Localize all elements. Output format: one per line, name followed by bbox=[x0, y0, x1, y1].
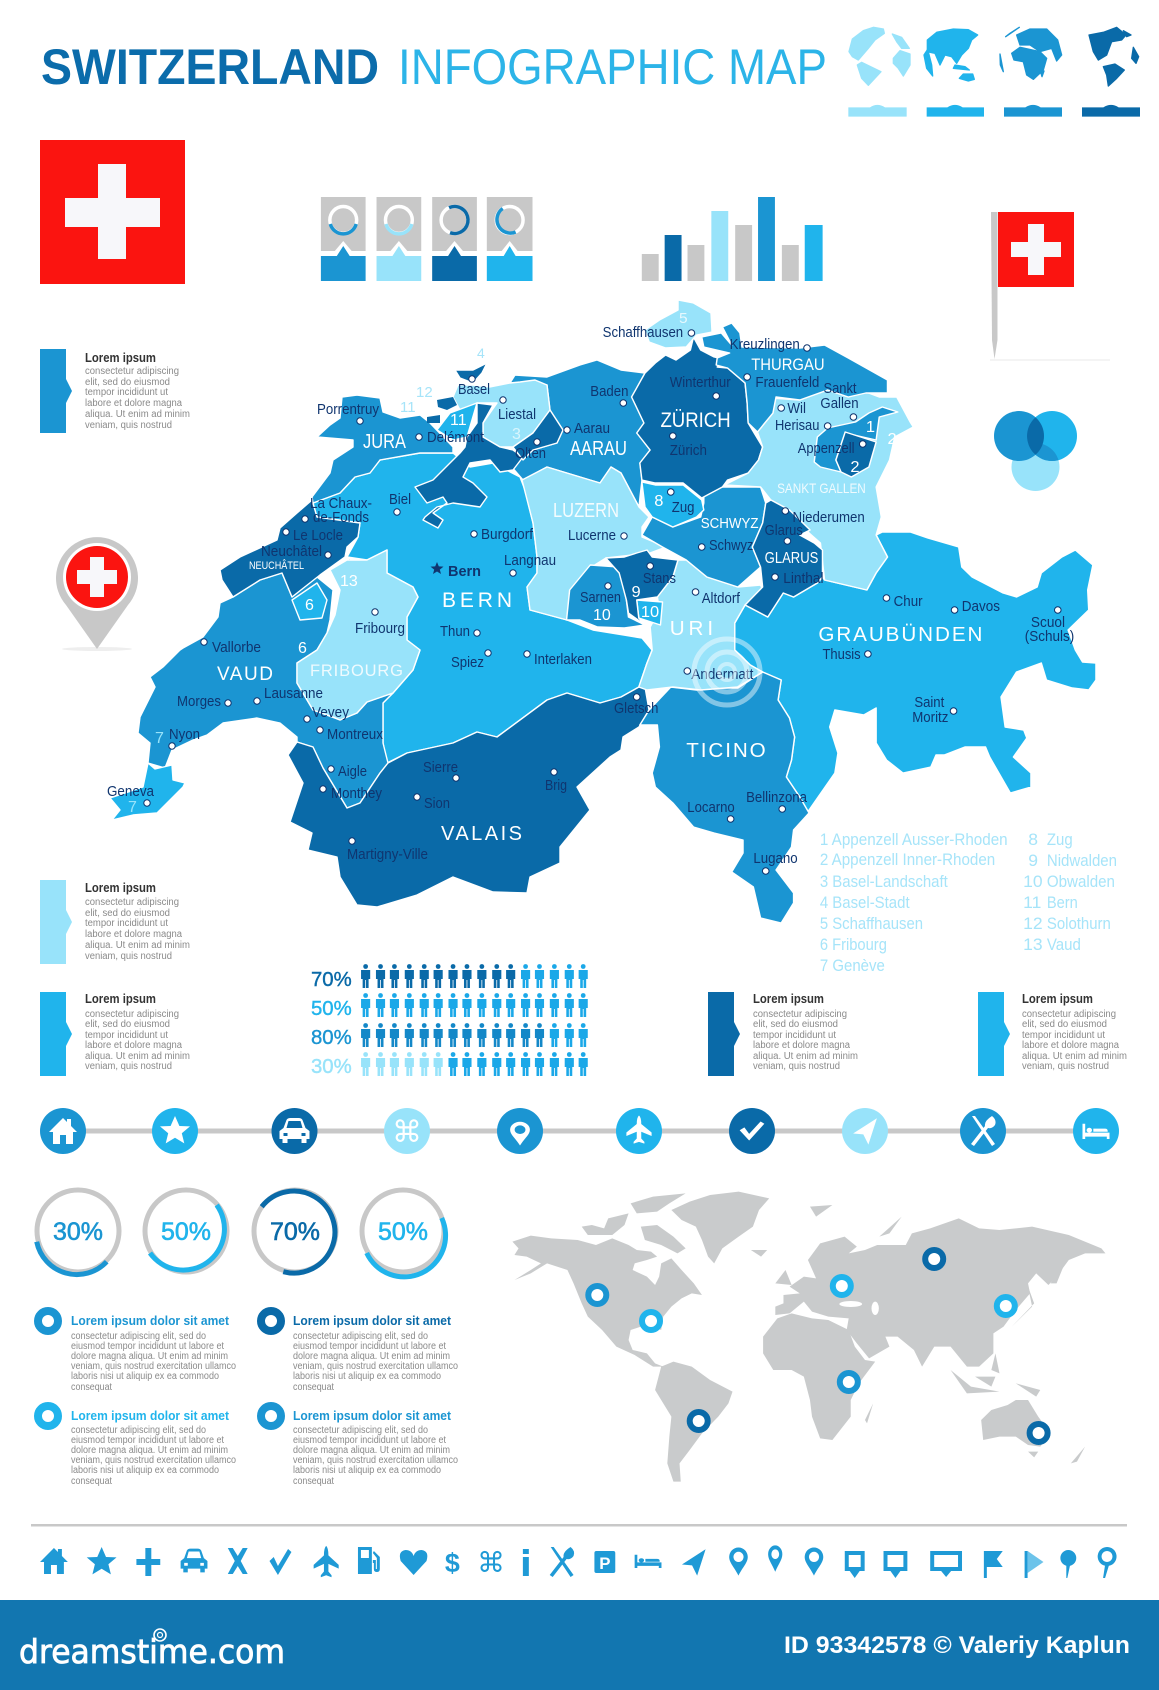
globe bars bbox=[848, 105, 1140, 117]
tile 1 bbox=[321, 197, 366, 281]
bullet text: row 1 right: Lorem ipsum dolor sit amet bbox=[293, 1314, 452, 1328]
text block: bottom left bbox=[40, 992, 190, 1076]
bullet text: row 1 left: Lorem ipsum dolor sit amet bbox=[71, 1314, 230, 1328]
west city labels: Sion bbox=[424, 795, 450, 812]
icon row: P bbox=[599, 1554, 610, 1573]
bullet text: row 1 right: consequat bbox=[293, 1382, 334, 1393]
east region labels: SANKT GALLEN bbox=[777, 481, 866, 497]
bullet text: row 1 left: consectetur adipiscing elit, sed do bbox=[71, 1331, 206, 1342]
legend: canton numbers: 2 Appenzell Inner-Rhoden bbox=[820, 849, 995, 869]
pictogram chart bbox=[311, 964, 588, 1078]
east city labels: (Schuls) bbox=[1025, 628, 1074, 645]
west city labels: Interlaken bbox=[534, 651, 592, 668]
west region labels bbox=[128, 345, 627, 845]
east city labels: Schwyz bbox=[709, 537, 753, 554]
continents bbox=[512, 1192, 1105, 1482]
bullet text: row 1 right: dolore magna aliqua. Ut enim ad minim bbox=[293, 1351, 450, 1362]
icon: bed bbox=[1073, 1108, 1119, 1154]
text block: bottom right: aliqua. Ut enim ad minim bbox=[1022, 1051, 1127, 1062]
east city labels: Winterthur bbox=[670, 374, 731, 391]
canton: Zug bbox=[642, 482, 704, 527]
canton: Schaffhausen bbox=[645, 300, 712, 348]
text block: bottom centre bbox=[708, 992, 858, 1076]
west city labels: Vallorbe bbox=[212, 639, 261, 656]
west city labels: Sierre bbox=[423, 759, 458, 776]
title bbox=[41, 39, 827, 95]
west city labels: Aigle bbox=[338, 763, 367, 780]
west region labels: 13 bbox=[340, 573, 358, 590]
row: 30 percent bbox=[311, 1052, 588, 1078]
west region labels: 4 bbox=[477, 345, 485, 361]
east region labels: 2 bbox=[850, 458, 860, 476]
donut 50 percent: 50% bbox=[161, 1218, 211, 1246]
legend: canton numbers: 7 Genève bbox=[820, 955, 885, 975]
text block: bottom centre: labore et dolore magna bbox=[753, 1040, 850, 1051]
west region labels: AARAU bbox=[570, 438, 627, 460]
icon: check bbox=[729, 1108, 775, 1154]
text block: bottom centre: consectetur adipiscing bbox=[753, 1009, 847, 1020]
west city labels: Lucerne bbox=[568, 527, 616, 544]
canton: Graubunden bbox=[735, 532, 1096, 813]
east city labels: Moritz bbox=[912, 709, 948, 726]
world map bbox=[512, 1192, 1105, 1482]
text block: bottom right: consectetur adipiscing bbox=[1022, 1009, 1116, 1020]
west city labels: Burgdorf bbox=[481, 526, 534, 543]
east city labels: Lugano bbox=[753, 850, 798, 867]
text block: top left: elit, sed do eiusmod bbox=[85, 377, 170, 388]
text block: bottom centre: veniam, quis nostrud bbox=[753, 1061, 840, 1072]
venn diagram bbox=[994, 411, 1077, 491]
text block: bottom left: veniam, quis nostrud bbox=[85, 1061, 172, 1072]
canton: Luzern bbox=[522, 467, 666, 620]
title: INFOGRAPHIC MAP bbox=[398, 39, 827, 95]
donut 50 percent second bbox=[362, 1190, 446, 1277]
west city labels: Vevey bbox=[312, 704, 349, 721]
legend: canton numbers: 6 Fribourg bbox=[820, 934, 887, 954]
text block: middle left: tempor incididunt ut bbox=[85, 918, 168, 929]
west region labels: 12 bbox=[416, 384, 433, 401]
text block: top left: labore et dolore magna bbox=[85, 398, 182, 409]
bullet text: row 1 right: laboris nisi ut aliquip ex ea commodo bbox=[293, 1371, 441, 1382]
west city labels: Biel bbox=[389, 491, 411, 508]
canton: Fribourg bbox=[292, 550, 420, 720]
text block: bottom right: tempor incididunt ut bbox=[1022, 1030, 1105, 1041]
west city labels: Nyon bbox=[169, 726, 200, 743]
west city labels: Porrentruy bbox=[317, 401, 379, 418]
canton: Sankt Gallen bbox=[724, 390, 913, 590]
legend: canton numbers: 8 bbox=[1028, 829, 1038, 849]
bullet text: row 2 right: eiusmod tempor incididunt ut labore et bbox=[293, 1435, 446, 1446]
west city labels: Langnau bbox=[504, 552, 556, 569]
bullet text: row 2 right: veniam, quis nostrud exercitation ullamco bbox=[293, 1455, 458, 1466]
west city labels: Aarau bbox=[574, 420, 610, 437]
east city labels: Glarus bbox=[765, 522, 803, 539]
icon: home bbox=[40, 1108, 86, 1154]
legend: canton numbers: 3 Basel-Landschaft bbox=[820, 871, 948, 891]
east region labels: THURGAU bbox=[751, 354, 825, 374]
text block: bottom centre: tempor incididunt ut bbox=[753, 1030, 836, 1041]
canton: Ticino bbox=[640, 672, 809, 923]
east region labels: 9 bbox=[632, 583, 641, 601]
footer logo: dreamstime.com bbox=[19, 1632, 285, 1671]
legend: canton numbers: 13 bbox=[1023, 934, 1043, 954]
icon row: ⌘ bbox=[477, 1546, 505, 1579]
row: 30 percent: 30% bbox=[311, 1056, 352, 1078]
east city labels: Schaffhausen bbox=[603, 324, 683, 341]
west region labels: LUZERN bbox=[553, 500, 619, 522]
text block: bottom centre: aliqua. Ut enim ad minim bbox=[753, 1051, 858, 1062]
globe: dark bbox=[1089, 27, 1139, 86]
text block: top left: veniam, quis nostrud bbox=[85, 420, 172, 431]
icon: command: ⌘ bbox=[392, 1115, 422, 1150]
bullet text: row 2 left: dolore magna aliqua. Ut enim ad minim bbox=[71, 1445, 228, 1456]
bullet text: row 1 left: dolore magna aliqua. Ut enim ad minim bbox=[71, 1351, 228, 1362]
icon: pin bbox=[497, 1108, 543, 1154]
bullet text: row 2 right: laboris nisi ut aliquip ex ea commodo bbox=[293, 1465, 441, 1476]
east city labels: Frauenfeld bbox=[755, 374, 819, 391]
west city labels: Neuchâtel bbox=[261, 543, 322, 560]
swiss flag large bbox=[40, 140, 185, 284]
canton: Uri bbox=[639, 560, 763, 690]
donut 30 percent bbox=[37, 1190, 119, 1275]
west region labels: 6 bbox=[305, 597, 314, 614]
text block: bottom centre: Lorem ipsum bbox=[753, 992, 824, 1006]
east region labels: 8 bbox=[654, 492, 663, 510]
canton: Bern bbox=[313, 453, 652, 763]
text block: bottom right: veniam, quis nostrud bbox=[1022, 1061, 1109, 1072]
legend: canton numbers: Obwalden bbox=[1047, 871, 1115, 891]
donut 70 percent bbox=[254, 1190, 336, 1273]
bullet text: row 1 right: eiusmod tempor incididunt ut labore et bbox=[293, 1341, 446, 1352]
timeline of icons bbox=[40, 1108, 1119, 1154]
canton: Glarus bbox=[745, 500, 822, 617]
bullet text: row 2 left: eiusmod tempor incididunt ut labore et bbox=[71, 1435, 224, 1446]
east region labels: 10 bbox=[641, 603, 659, 621]
switzerland map bbox=[107, 300, 1096, 923]
west city labels: de-Fonds bbox=[313, 509, 369, 526]
bullet text: row 1 right: veniam, quis nostrud exercitation ullamco bbox=[293, 1361, 458, 1372]
west city labels: La Chaux- bbox=[310, 495, 372, 512]
row: 70 percent bbox=[311, 964, 588, 991]
canton: Valais bbox=[288, 663, 649, 907]
footer bar bbox=[0, 1600, 1159, 1690]
bullet text: row 2 left: veniam, quis nostrud exercitation ullamco bbox=[71, 1455, 236, 1466]
donut 70 percent: 70% bbox=[270, 1218, 320, 1246]
east city labels: Gletsch bbox=[614, 700, 658, 717]
west region labels: NEUCHÂTEL bbox=[249, 559, 304, 572]
tile 4 bbox=[487, 197, 533, 281]
location pin with flag bbox=[56, 537, 138, 651]
eastern cantons bbox=[567, 300, 1096, 923]
text block: bottom left: labore et dolore magna bbox=[85, 1040, 182, 1051]
star: capital Bern bbox=[430, 562, 444, 574]
bullet text: row 1 left: consequat bbox=[71, 1382, 112, 1393]
west city labels: Le Locle bbox=[293, 527, 343, 544]
west region labels: 11 bbox=[450, 412, 467, 429]
icon: plane bbox=[616, 1108, 662, 1154]
east city labels: Andermatt bbox=[691, 666, 754, 683]
bullet text: row 2 left: consectetur adipiscing elit, sed do bbox=[71, 1425, 206, 1436]
canton: Appenzell Ausser-Rhoden bbox=[814, 407, 898, 472]
flag on pole bbox=[990, 212, 1110, 360]
bullet text: row 1 left: eiusmod tempor incididunt ut labore et bbox=[71, 1341, 224, 1352]
bullet text: row 2 right: dolore magna aliqua. Ut enim ad minim bbox=[293, 1445, 450, 1456]
east city labels: Scuol bbox=[1031, 614, 1065, 631]
legend: canton numbers: Solothurn bbox=[1047, 913, 1111, 933]
canton: Appenzell Inner-Rhoden bbox=[836, 432, 876, 477]
text block: bottom left: consectetur adipiscing bbox=[85, 1009, 179, 1020]
row: 50 percent bbox=[311, 993, 588, 1020]
bullet text: row 1 left: veniam, quis nostrud exercitation ullamco bbox=[71, 1361, 236, 1372]
text block: bottom left: aliqua. Ut enim ad minim bbox=[85, 1051, 190, 1062]
canton: Obwalden bbox=[567, 565, 663, 628]
east city labels: Herisau bbox=[775, 417, 819, 434]
legend: canton numbers: 11 bbox=[1023, 892, 1041, 912]
west city dots bbox=[144, 376, 627, 844]
canton: Schwyz bbox=[642, 487, 766, 587]
east region labels: GRAUBÜNDEN bbox=[818, 624, 982, 646]
text block: middle left: elit, sed do eiusmod bbox=[85, 908, 170, 919]
text block: bottom right: elit, sed do eiusmod bbox=[1022, 1019, 1107, 1030]
text block: top left bbox=[40, 349, 190, 433]
legend: canton numbers: 10 bbox=[1023, 871, 1043, 891]
east region labels: SCHWYZ bbox=[701, 515, 758, 532]
bullet text: row 2 left: laboris nisi ut aliquip ex ea commodo bbox=[71, 1465, 219, 1476]
canton: Geneve bbox=[110, 763, 185, 820]
west region labels: 11 bbox=[400, 399, 416, 416]
east city labels: Zürich bbox=[670, 442, 707, 459]
legend: canton numbers: Vaud bbox=[1047, 934, 1081, 954]
text block: bottom right: Lorem ipsum bbox=[1022, 992, 1093, 1006]
globe: light bbox=[849, 27, 910, 85]
canton: Basel-Stadt bbox=[455, 363, 487, 383]
west region labels: 3 bbox=[512, 426, 521, 443]
east city labels: Saint bbox=[914, 694, 945, 711]
east city labels: Wil bbox=[787, 400, 806, 417]
bullet text: row 1 right bbox=[261, 1311, 458, 1393]
east city dots bbox=[620, 330, 1061, 874]
east city labels: Kreuzlingen bbox=[730, 336, 800, 353]
canton: Zurich bbox=[632, 337, 763, 498]
canton: Nidwalden bbox=[606, 550, 678, 625]
west city labels bbox=[107, 381, 621, 863]
tile 3 bbox=[432, 197, 477, 281]
legend: canton numbers: 12 bbox=[1023, 913, 1043, 933]
west city labels: Brig bbox=[545, 777, 567, 794]
east city labels: Davos bbox=[962, 598, 1000, 615]
bullet text: row 2 left bbox=[38, 1406, 236, 1487]
east city labels: Niederumen bbox=[793, 509, 865, 526]
row: 80 percent bbox=[311, 1023, 588, 1049]
canton: Jura bbox=[312, 395, 453, 503]
legend: canton numbers: Nidwalden bbox=[1047, 850, 1117, 870]
legend: canton numbers: Bern bbox=[1047, 892, 1078, 912]
canton: Basel-Landschaft bbox=[453, 380, 550, 447]
legend: canton numbers: 1 Appenzell Ausser-Rhoden bbox=[820, 829, 1008, 849]
east city labels: Altdorf bbox=[702, 590, 741, 607]
west city labels: Liestal bbox=[498, 406, 536, 423]
bullet text: row 2 right: Lorem ipsum dolor sit amet bbox=[293, 1409, 452, 1423]
tile 2 bbox=[377, 197, 421, 281]
text block: bottom left: tempor incididunt ut bbox=[85, 1030, 168, 1041]
bullet text: row 1 left: laboris nisi ut aliquip ex ea commodo bbox=[71, 1371, 219, 1382]
west region labels: 6 bbox=[298, 640, 307, 657]
watermark rings bbox=[694, 639, 760, 705]
east region labels: TICINO bbox=[686, 740, 766, 762]
donut 50 percent second: 50% bbox=[378, 1218, 428, 1246]
east region labels: ZÜRICH bbox=[660, 408, 731, 432]
west city labels: Monthey bbox=[331, 785, 382, 802]
text block: middle left bbox=[40, 880, 190, 964]
text block: bottom right bbox=[978, 992, 1127, 1076]
canton: Thurgau bbox=[702, 323, 887, 432]
title: SWITZERLAND bbox=[41, 39, 379, 95]
east city labels: Linthal bbox=[783, 570, 824, 587]
globe: bright bbox=[924, 29, 978, 81]
canton: Bern exclave bbox=[437, 403, 477, 440]
footer credit: ID 93342578 © Valeriy Kaplun bbox=[784, 1632, 1130, 1659]
icon: cutlery bbox=[960, 1108, 1006, 1154]
row: 80 percent: 80% bbox=[311, 1027, 352, 1049]
east region labels: 2 bbox=[887, 430, 897, 448]
east city labels: Thusis bbox=[822, 646, 861, 663]
donut charts bbox=[37, 1190, 446, 1277]
west city labels: Olten bbox=[515, 445, 546, 462]
east city labels: Gallen bbox=[820, 395, 859, 412]
east region labels bbox=[632, 310, 982, 762]
west city labels: Spiez bbox=[451, 654, 484, 671]
legend: canton numbers: Zug bbox=[1047, 829, 1073, 849]
west region labels: 10 bbox=[593, 607, 611, 624]
text block: bottom centre: elit, sed do eiusmod bbox=[753, 1019, 838, 1030]
east city labels bbox=[590, 324, 1074, 867]
west city labels: Montreux bbox=[327, 726, 383, 743]
west city labels: Morges bbox=[177, 693, 221, 710]
icon: send bbox=[842, 1108, 888, 1154]
bullet text: row 2 right bbox=[261, 1406, 458, 1487]
legend: canton numbers: 9 bbox=[1028, 850, 1038, 870]
icon: star bbox=[152, 1108, 198, 1154]
west city labels: Martigny-Ville bbox=[347, 846, 428, 863]
row: 70 percent: 70% bbox=[311, 969, 352, 991]
text block: middle left: Lorem ipsum bbox=[85, 881, 156, 895]
canton: Neuchatel bbox=[220, 500, 360, 597]
east city labels: Chur bbox=[894, 593, 923, 610]
donut 30 percent: 30% bbox=[53, 1218, 103, 1246]
east city labels: Stans bbox=[643, 570, 676, 587]
west city labels: Sarnen bbox=[580, 589, 621, 606]
bullet text: row 1 left bbox=[38, 1311, 236, 1393]
row: 50 percent: 50% bbox=[311, 998, 352, 1020]
text block: bottom right: labore et dolore magna bbox=[1022, 1040, 1119, 1051]
west region labels: BERN bbox=[442, 589, 512, 612]
legend: canton numbers: 4 Basel-Stadt bbox=[820, 892, 910, 912]
bullet text: row 2 left: consequat bbox=[71, 1476, 112, 1487]
icon row bbox=[40, 1545, 1117, 1579]
map pins bbox=[588, 1250, 1048, 1442]
east city labels: Sankt bbox=[824, 380, 857, 397]
canton: Solothurn bbox=[415, 397, 563, 528]
east region labels: URI bbox=[670, 618, 713, 640]
bullet text: row 2 right: consectetur adipiscing elit, sed do bbox=[293, 1425, 428, 1436]
bar chart bbox=[642, 197, 823, 281]
canton: Aargau bbox=[510, 360, 650, 507]
ring tiles bbox=[321, 197, 533, 281]
globe: mid bbox=[1000, 27, 1062, 79]
east city labels: Zug bbox=[672, 499, 695, 516]
east region labels: 5 bbox=[679, 310, 688, 327]
west region labels: JURA bbox=[363, 431, 407, 453]
east city labels: Appenzell bbox=[798, 440, 854, 457]
divider line bbox=[31, 1524, 1127, 1526]
globes bbox=[848, 27, 1140, 117]
west city labels: Fribourg bbox=[355, 620, 405, 637]
west city labels: Thun bbox=[440, 623, 470, 640]
west region labels: 7 bbox=[155, 730, 164, 747]
east region labels: 1 bbox=[866, 418, 875, 436]
west city labels: Delémont bbox=[427, 429, 485, 446]
text block: bottom left: Lorem ipsum bbox=[85, 992, 156, 1006]
west region labels: VAUD bbox=[217, 664, 273, 685]
text block: top left: aliqua. Ut enim ad minim bbox=[85, 409, 190, 420]
text block: top left: tempor incididunt ut bbox=[85, 387, 168, 398]
text block: middle left: consectetur adipiscing bbox=[85, 897, 179, 908]
bullet text: row 2 right: consequat bbox=[293, 1476, 334, 1487]
legend: canton numbers: 5 Schaffhausen bbox=[820, 913, 923, 933]
canton: Vaud bbox=[138, 558, 393, 808]
east region labels: GLARUS bbox=[765, 549, 818, 567]
west region labels: 7 bbox=[128, 799, 137, 816]
icon: car bbox=[272, 1108, 318, 1154]
text block: middle left: veniam, quis nostrud bbox=[85, 951, 172, 962]
text block: bottom left: elit, sed do eiusmod bbox=[85, 1019, 170, 1030]
text block: top left: consectetur adipiscing bbox=[85, 366, 179, 377]
west city labels: Lausanne bbox=[264, 685, 323, 702]
west city labels: Bern bbox=[448, 563, 481, 580]
west city labels: Geneva bbox=[107, 783, 155, 800]
icon row: $ bbox=[445, 1548, 460, 1578]
east city labels: Locarno bbox=[687, 799, 735, 816]
text block: middle left: labore et dolore magna bbox=[85, 929, 182, 940]
east city labels: Baden bbox=[590, 383, 628, 400]
east city labels: Bellinzona bbox=[746, 789, 807, 806]
legend: canton numbers bbox=[820, 829, 1117, 975]
donut 50 percent bbox=[145, 1190, 227, 1272]
text block: top left: Lorem ipsum bbox=[85, 351, 156, 365]
text block: middle left: aliqua. Ut enim ad minim bbox=[85, 940, 190, 951]
bullet text: row 2 left: Lorem ipsum dolor sit amet bbox=[71, 1409, 230, 1423]
bullet text: row 1 right: consectetur adipiscing elit, sed do bbox=[293, 1331, 428, 1342]
west region labels: VALAIS bbox=[441, 823, 522, 845]
west city labels: Basel bbox=[458, 381, 490, 398]
west region labels: FRIBOURG bbox=[310, 662, 403, 680]
icon: command bbox=[384, 1108, 430, 1154]
